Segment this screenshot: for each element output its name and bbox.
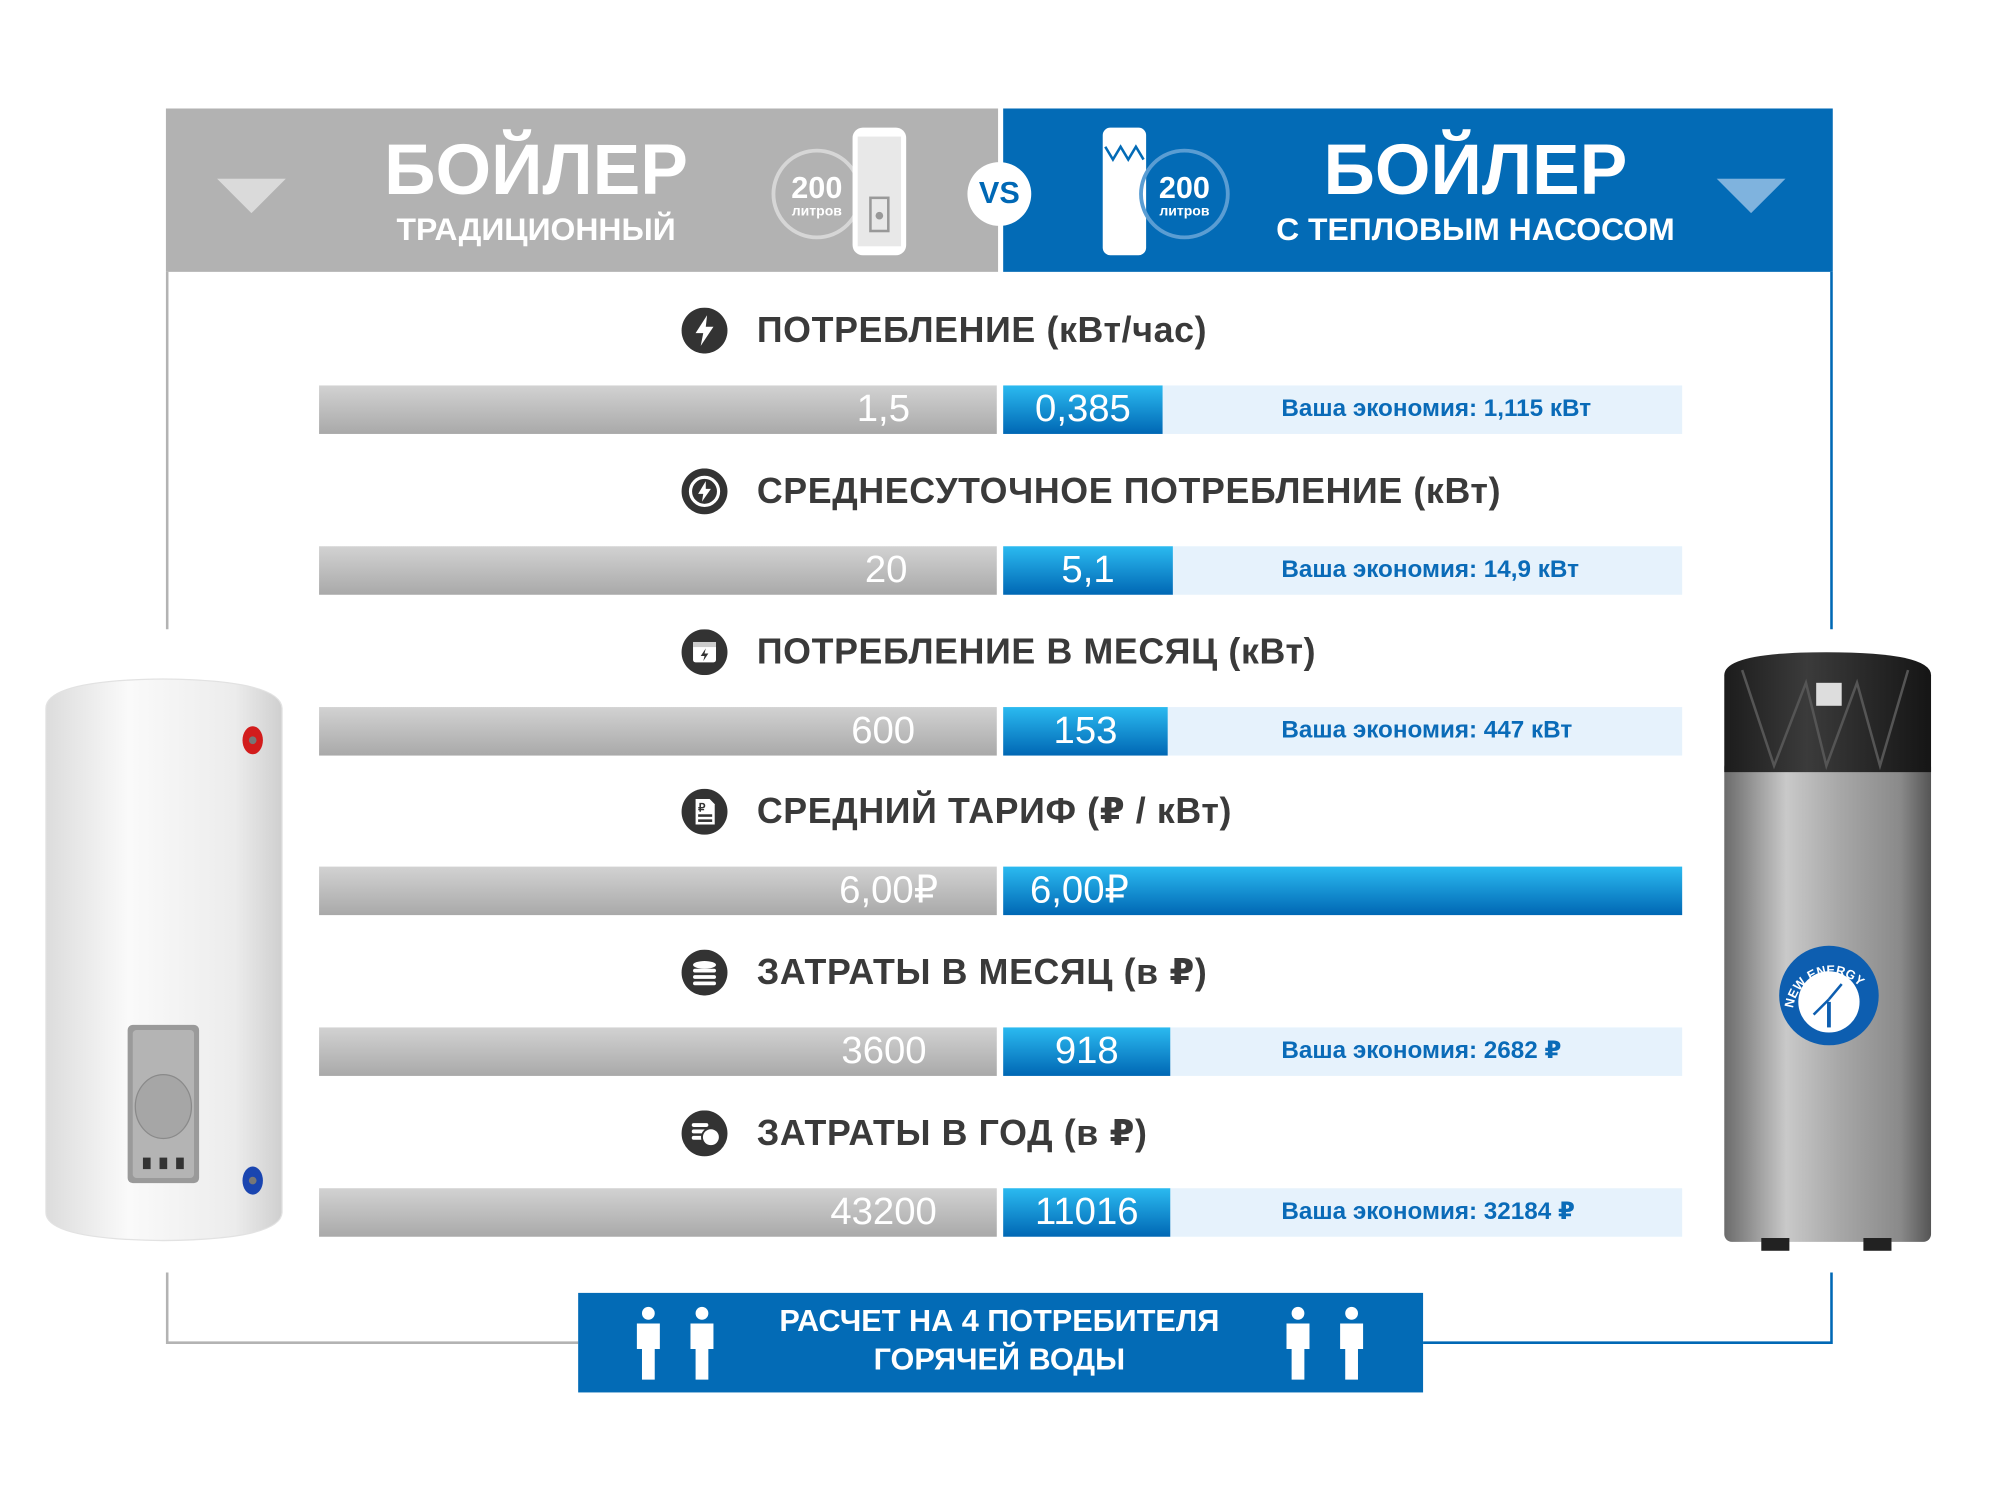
icon: document bbox=[682, 788, 728, 835]
bars bbox=[319, 1027, 997, 1076]
heading: ЗАТРАТЫ В МЕСЯЦ (в ₽) bbox=[757, 952, 1207, 992]
row 5 bbox=[319, 950, 1682, 1076]
bars bbox=[319, 546, 997, 595]
icon: document: ₽ bbox=[698, 803, 705, 815]
heading: ПОТРЕБЛЕНИЕ (кВт/час) bbox=[757, 310, 1207, 350]
bars bbox=[319, 707, 997, 756]
row 6: Ваша экономия: 32184 ₽ bbox=[1281, 1198, 1575, 1225]
title left: ТРАДИЦИОННЫЙ bbox=[396, 212, 676, 248]
heading: СРЕДНИЙ ТАРИФ (₽ / кВт) bbox=[757, 791, 1232, 831]
row 4 bbox=[319, 788, 1682, 916]
title left bbox=[384, 129, 688, 248]
bars: 600 bbox=[851, 710, 915, 752]
title right bbox=[1276, 129, 1675, 248]
row 5: 918 bbox=[1055, 1030, 1119, 1072]
vs badge bbox=[967, 162, 1031, 226]
vs badge: VS bbox=[979, 176, 1020, 211]
icon: 200 litres badge left bbox=[772, 128, 906, 256]
icon: triangle right bbox=[1716, 178, 1786, 213]
footer text: ГОРЯЧЕЙ ВОДЫ bbox=[874, 1343, 1125, 1377]
row 4: 6,00₽ bbox=[1030, 869, 1129, 911]
icon: 200 litres badge left: 200 bbox=[791, 171, 842, 205]
icon: calendar bbox=[682, 629, 728, 676]
row 1: Ваша экономия: 1,115 кВт bbox=[1281, 396, 1591, 422]
title right: БОЙЛЕР bbox=[1323, 129, 1627, 209]
illustration: heat pump boiler bbox=[1724, 652, 1932, 1251]
header: traditional boiler bbox=[166, 108, 998, 272]
footer text: РАСЧЕТ НА 4 ПОТРЕБИТЕЛЯ bbox=[779, 1304, 1219, 1339]
row 6: 11016 bbox=[1035, 1191, 1139, 1233]
row 5: Ваша экономия: 2682 ₽ bbox=[1281, 1038, 1561, 1064]
bars bbox=[319, 385, 997, 434]
row 6 bbox=[319, 1110, 1682, 1237]
title right: С ТЕПЛОВЫМ НАСОСОМ bbox=[1276, 212, 1675, 248]
row 2: 5,1 bbox=[1061, 549, 1115, 591]
illustration: traditional boiler bbox=[45, 678, 283, 1242]
row 3: Ваша экономия: 447 кВт bbox=[1281, 717, 1572, 744]
icon: people right bbox=[1286, 1306, 1364, 1380]
header: heat pump boiler bbox=[1003, 108, 1833, 272]
icon: 200 litres badge right: литров bbox=[1159, 203, 1210, 219]
footer banner bbox=[578, 1293, 1423, 1392]
row 1: 0,385 bbox=[1035, 388, 1131, 430]
heading: СРЕДНЕСУТОЧНОЕ ПОТРЕБЛЕНИЕ (кВт) bbox=[757, 471, 1501, 511]
bars bbox=[319, 867, 997, 915]
icon: coins stack bbox=[682, 950, 728, 996]
illustration: heat pump boiler: NEW ENERGY bbox=[1784, 965, 1866, 1008]
row 2 bbox=[319, 468, 1682, 595]
bars: 6,00₽ bbox=[839, 869, 938, 911]
logo bbox=[1779, 946, 1879, 1045]
bars: 43200 bbox=[830, 1191, 937, 1233]
row 2: Ваша экономия: 14,9 кВт bbox=[1281, 556, 1579, 583]
row 1 bbox=[319, 308, 1682, 434]
icon: people left bbox=[636, 1306, 714, 1380]
bars bbox=[319, 1188, 997, 1237]
heading: ПОТРЕБЛЕНИЕ В МЕСЯЦ (кВт) bbox=[757, 632, 1316, 671]
icon: lightning bbox=[682, 308, 728, 354]
icon: coins bbox=[682, 1110, 728, 1156]
bars: 3600 bbox=[841, 1030, 927, 1072]
title left: БОЙЛЕР bbox=[384, 129, 688, 209]
row 3 bbox=[319, 629, 1682, 756]
icon: 200 litres badge right: 200 bbox=[1159, 171, 1210, 205]
icon: triangle left bbox=[217, 178, 286, 213]
footer text bbox=[779, 1304, 1219, 1377]
icon: 200 litres badge left: литров bbox=[792, 203, 842, 219]
icon: 200 litres badge right bbox=[1102, 128, 1230, 256]
row 3: 153 bbox=[1054, 710, 1117, 752]
icon: cycle bbox=[682, 468, 728, 514]
bars: 20 bbox=[865, 549, 907, 591]
heading: ЗАТРАТЫ В ГОД (в ₽) bbox=[757, 1113, 1147, 1152]
bars: 1,5 bbox=[857, 388, 910, 430]
